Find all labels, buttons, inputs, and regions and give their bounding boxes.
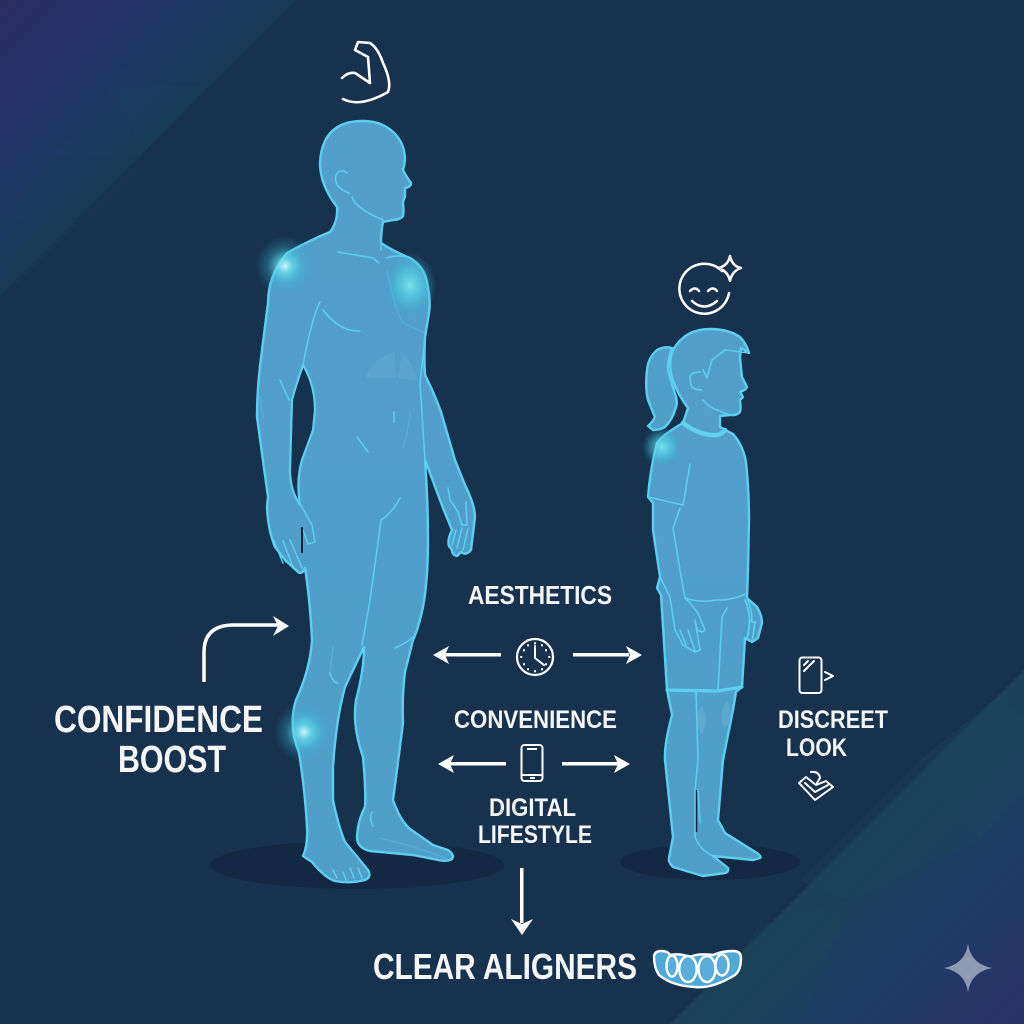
torso shading — [365, 352, 417, 380]
child figure — [646, 329, 762, 876]
glow: adult leg — [274, 702, 334, 762]
child gap between legs — [695, 790, 697, 832]
arrow: down to clear aligners — [511, 868, 533, 935]
arrow: aesthetics right — [573, 646, 642, 664]
label: digital lifestyle: LIFESTYLE — [478, 821, 592, 849]
arrow: curved to adult — [204, 616, 289, 682]
glow: adult shoulder — [255, 236, 315, 296]
icon: smiling face with sparkle — [679, 256, 741, 314]
anatomy lines — [260, 171, 468, 880]
label: digital lifestyle: DIGITAL — [489, 794, 576, 822]
icon: aligner tray — [654, 951, 741, 987]
glow: adult chest — [384, 253, 436, 317]
icon: sparkle watermark — [944, 944, 992, 992]
label: discreet look: DISCREET — [778, 706, 888, 734]
adult figure — [257, 121, 475, 882]
arrow: aesthetics left — [433, 646, 501, 664]
label: confidence boost: CONFIDENCE — [54, 699, 263, 741]
arrow: convenience left — [438, 755, 506, 773]
label: discreet look — [778, 706, 888, 762]
label: clear aligners: CLEAR ALIGNERS — [373, 946, 637, 987]
label: confidence boost: BOOST — [118, 739, 226, 781]
label: convenience: CONVENIENCE — [454, 706, 617, 734]
icon: clock — [517, 639, 553, 675]
icon: flexed arm — [342, 42, 389, 102]
label: discreet look: LOOK — [786, 734, 847, 762]
icon: smartphone — [522, 745, 542, 781]
label: aesthetics: AESTHETICS — [468, 580, 612, 610]
icon: mirror — [800, 658, 833, 693]
child knee highlights — [697, 700, 731, 735]
child detail lines — [648, 350, 756, 856]
ponytail — [646, 347, 677, 430]
icon: tray — [799, 772, 833, 800]
glow: child shoulder — [642, 427, 682, 467]
label: digital lifestyle — [478, 794, 592, 849]
floor shadow: adult — [210, 841, 504, 889]
arrow: convenience right — [562, 755, 630, 773]
gap between arm and torso — [290, 365, 315, 505]
label: confidence boost — [54, 699, 263, 781]
floor shadow: child — [620, 844, 800, 880]
